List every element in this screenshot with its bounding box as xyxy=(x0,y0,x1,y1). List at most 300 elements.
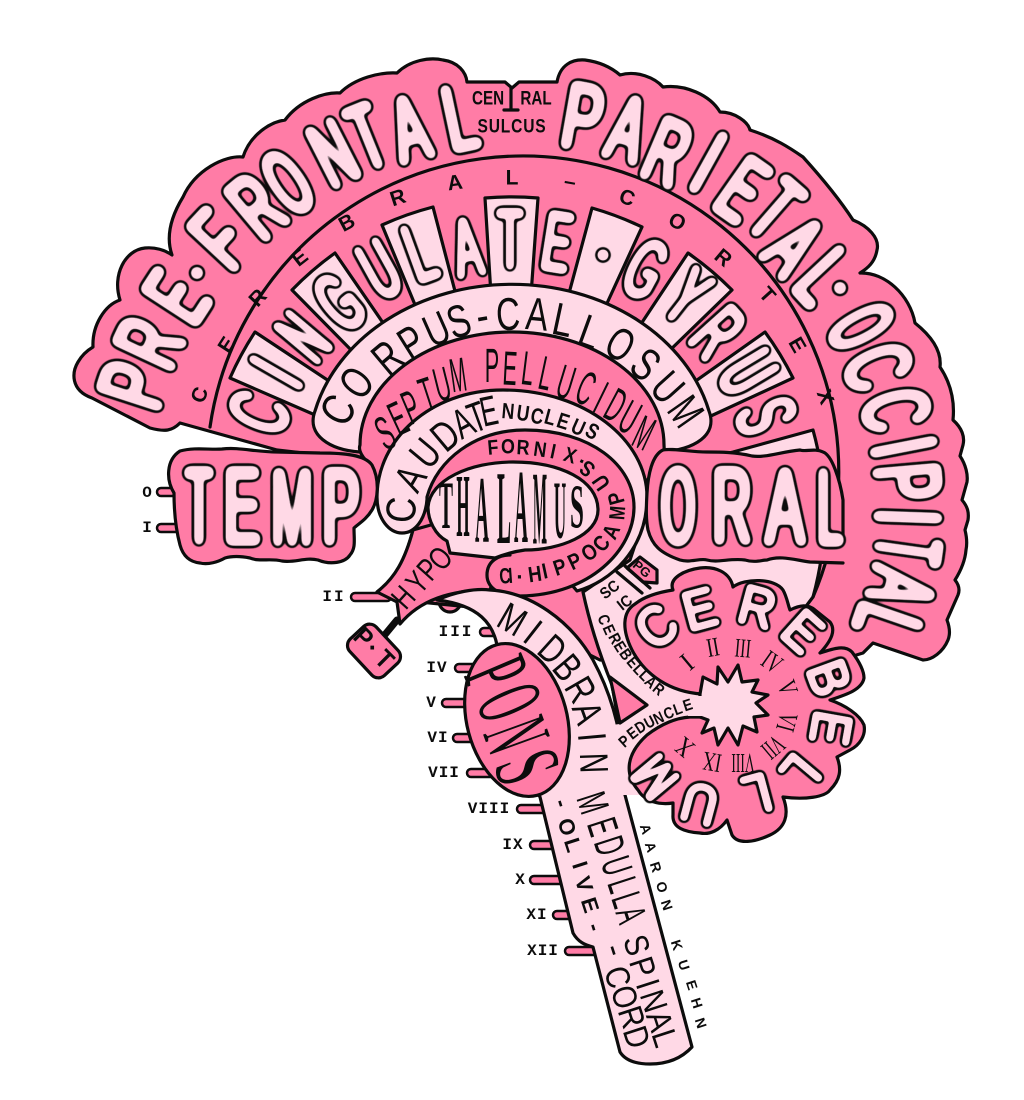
septum pellucidum lettering xyxy=(367,338,663,461)
hippocampus lettering: O xyxy=(577,539,603,567)
hippocampus lettering xyxy=(499,455,631,590)
cerebellum lettering: R xyxy=(732,574,782,642)
colliculus lettering: IC xyxy=(614,592,636,614)
cranial nerve labels: IV xyxy=(426,659,448,677)
temporal lettering: M xyxy=(272,446,312,568)
thalamus lettering: S xyxy=(570,474,584,542)
septum pellucidum lettering: T xyxy=(412,366,442,422)
peduncle light patch xyxy=(612,715,690,795)
caudate lettering: E xyxy=(476,388,502,436)
cord lettering: D xyxy=(615,1021,659,1053)
medulla lettering: D xyxy=(584,831,634,861)
cerebral cortex small label: – xyxy=(562,170,578,194)
artist credit: N xyxy=(692,1016,710,1030)
hippocampus lettering: P xyxy=(550,555,570,581)
fornix lettering: R xyxy=(516,436,530,460)
cerebral cortex small label: B xyxy=(335,209,359,237)
spinal lettering: L xyxy=(644,1024,686,1052)
cerebellar lettering: R xyxy=(604,631,624,648)
cranial nerve labels: VII xyxy=(428,764,460,782)
hippocampus lettering: C xyxy=(589,531,616,557)
cingulate gyrus lettering: S xyxy=(716,387,814,445)
corpus callosum lettering: L xyxy=(548,293,578,347)
prefrontal lettering: R xyxy=(94,304,206,382)
septum pellucidum lettering: U xyxy=(551,354,581,410)
thalamus shape xyxy=(428,462,598,558)
parietal occipital lettering: O xyxy=(807,289,913,365)
pons lettering xyxy=(444,642,581,797)
hippocampus lettering: P xyxy=(564,549,586,575)
artist credit: A xyxy=(642,840,660,854)
midbrain lettering: M xyxy=(490,595,534,645)
cerebellar lettering: L xyxy=(635,667,653,685)
artist credit: R xyxy=(647,860,665,874)
septum pellucidum lettering: E xyxy=(501,341,519,395)
nucleus lettering: E xyxy=(554,409,572,435)
temporal lettering: T xyxy=(186,447,212,567)
medulla lettering: L xyxy=(602,887,650,913)
septum pellucidum lettering: S xyxy=(367,405,403,461)
fornix hippocampus ring xyxy=(427,430,634,596)
olive lettering: - xyxy=(582,920,608,934)
septum pellucidum lettering: D xyxy=(596,377,636,433)
hippocampus lettering: I xyxy=(540,560,550,584)
cerebellum lobule numerals xyxy=(669,632,804,778)
peduncle opening xyxy=(688,696,712,716)
cerebellum lettering: B xyxy=(794,652,862,704)
septum pellucidum lettering: U xyxy=(428,356,456,412)
nucleus lettering xyxy=(501,399,603,445)
nucleus lettering: N xyxy=(501,399,515,425)
cerebellum lettering: C xyxy=(624,592,690,662)
hypothalamus lettering: Y xyxy=(398,564,436,600)
pons lettering: N xyxy=(463,705,571,765)
central sulcus label: SULCUS xyxy=(478,115,546,137)
hypothalamus lettering: O xyxy=(420,539,460,577)
cingulate gyrus lettering: T xyxy=(497,193,523,287)
septum pellucidum lettering: P xyxy=(485,338,499,392)
corpus callosum lettering: P xyxy=(389,316,435,370)
thalamus lettering: L xyxy=(497,451,511,567)
prefrontal lettering: L xyxy=(434,64,486,172)
hippocampus lettering: M xyxy=(605,505,631,521)
hypothalamus lettering xyxy=(384,539,460,616)
cerebral cortex small label: L xyxy=(506,166,519,190)
temporal lettering: L xyxy=(817,446,843,568)
prefrontal lettering xyxy=(77,64,486,420)
olive lettering xyxy=(549,796,608,934)
spinal lettering: I xyxy=(628,974,668,994)
corpus callosum lettering: - xyxy=(471,288,493,342)
nucleus lettering: L xyxy=(542,405,558,431)
temporal lobe left xyxy=(169,449,377,564)
hippocampus lettering: · xyxy=(516,564,524,590)
cerebellum lettering: L xyxy=(736,760,778,826)
cingulate gyrus lettering: G xyxy=(297,257,383,349)
cerebral cortex small label: C xyxy=(616,185,638,211)
cerebellum lobule numerals: X xyxy=(669,730,701,763)
cranial nerve labels: III xyxy=(439,623,473,641)
caudate lettering: U xyxy=(399,429,451,477)
cord lettering: C xyxy=(596,961,640,993)
artist credit: U xyxy=(675,958,693,972)
septum pellucidum lettering: L xyxy=(519,340,537,396)
hippocampus lettering: A xyxy=(598,521,626,543)
pituitary stalk xyxy=(383,620,397,637)
pituitary lettering: P xyxy=(347,622,379,654)
thalamus lettering: A xyxy=(514,450,528,566)
peduncle lettering: P xyxy=(616,732,634,751)
cerebellar lettering: A xyxy=(641,673,660,693)
pituitary lettering xyxy=(347,622,399,675)
midbrain lettering: B xyxy=(544,646,590,690)
medulla lettering: E xyxy=(577,812,627,842)
corpus callosum lettering: S xyxy=(441,295,477,349)
caudate lettering: T xyxy=(461,392,493,442)
thalamus lettering: M xyxy=(533,451,547,567)
corpus callosum lettering: O xyxy=(596,317,644,373)
cerebral cortex small label: A xyxy=(446,171,464,195)
cingulate gyrus lettering: U xyxy=(344,222,416,318)
cerebellum lettering: E xyxy=(769,598,835,666)
fornix lettering xyxy=(487,435,590,474)
septum pellucidum lettering: U xyxy=(610,389,650,445)
thalamus lettering: U xyxy=(554,464,566,556)
cerebral cortex small label: X xyxy=(812,386,838,408)
prefrontal lettering: O xyxy=(245,131,331,235)
colliculus lettering: SC xyxy=(597,577,623,603)
hypothalamus lettering: H xyxy=(384,578,422,616)
spinal lettering xyxy=(616,930,686,1052)
artist credit: E xyxy=(683,978,701,992)
parietal occipital lettering: C xyxy=(821,330,933,404)
cerebellar lettering: L xyxy=(629,661,647,679)
septum pellucidum lettering: E xyxy=(380,390,416,446)
cingulate gyrus light segments xyxy=(230,197,793,421)
nucleus lettering: U xyxy=(515,401,531,427)
parietal occipital lettering: C xyxy=(839,379,951,441)
cerebellar lettering: E xyxy=(609,639,629,655)
cord lettering: R xyxy=(610,1001,654,1033)
superior colliculus links xyxy=(617,566,650,593)
peduncle lettering: D xyxy=(632,718,650,738)
thalamus lettering: A xyxy=(475,457,489,563)
corpus callosum lettering: M xyxy=(657,387,713,437)
olive lettering: - xyxy=(549,796,575,810)
midbrain lettering: A xyxy=(563,696,611,730)
cerebral cortex small label: O xyxy=(664,208,690,236)
cord lettering: - xyxy=(595,939,635,961)
central sulcus label: RAL xyxy=(520,87,552,109)
corpus callosum lettering: U xyxy=(416,302,458,358)
nucleus lettering: C xyxy=(529,404,545,430)
olive lettering: I xyxy=(567,858,593,872)
olive lettering: O xyxy=(552,815,582,839)
caudate lettering: C xyxy=(378,495,426,525)
cranial nerve labels: I xyxy=(142,519,152,537)
spinal lettering: S xyxy=(616,930,658,960)
midbrain lettering xyxy=(490,595,615,774)
midbrain lettering: N xyxy=(571,752,615,774)
parietal occipital lettering: R xyxy=(629,97,705,209)
midbrain lettering: I xyxy=(516,611,550,653)
cerebellum lettering xyxy=(620,574,863,837)
parietal occipital lettering: A xyxy=(596,75,658,185)
nucleus lettering: U xyxy=(567,414,589,442)
olive lettering: L xyxy=(559,835,587,855)
pons lettering: P xyxy=(444,642,550,704)
cerebral cortex small label: E xyxy=(784,333,810,357)
corpus callosum lettering: A xyxy=(524,289,550,341)
parietal occipital lettering: I xyxy=(855,507,959,527)
medulla lettering: M xyxy=(567,787,617,819)
cord lettering xyxy=(595,939,659,1053)
parietal occipital lettering: P xyxy=(555,62,611,172)
corpus callosum shape xyxy=(313,284,711,452)
caudate nucleus shape xyxy=(377,390,647,591)
prefrontal lettering: N xyxy=(293,98,373,208)
pons lettering: S xyxy=(473,737,581,797)
mammillary body xyxy=(439,590,461,612)
cerebellum lettering: L xyxy=(768,742,832,802)
hippocampus lettering: P xyxy=(604,489,630,507)
cingulate gyrus lettering xyxy=(211,193,814,446)
corpus callosum lettering: C xyxy=(309,386,367,434)
corpus callosum lettering: C xyxy=(495,289,521,341)
nucleus lettering: S xyxy=(581,419,603,445)
thalamus lettering: T xyxy=(439,467,453,543)
cingulate outer arc xyxy=(210,156,839,597)
cerebellar lettering: B xyxy=(615,646,635,664)
prefrontal lettering: R xyxy=(209,155,305,259)
peduncle lettering: N xyxy=(651,709,667,729)
thalamus lettering: H xyxy=(456,457,470,557)
cingulate gyrus lettering: U xyxy=(699,336,795,410)
pituitary lettering: T xyxy=(369,645,399,675)
cerebellum xyxy=(625,568,864,841)
prefrontal lettering: F xyxy=(170,192,270,288)
cerebral cortex silhouette xyxy=(74,59,968,660)
cerebellum lobule numerals: II xyxy=(704,632,722,664)
caudate lettering: A xyxy=(384,457,436,499)
fornix lettering: I xyxy=(548,440,558,464)
cingulate gyrus lettering: A xyxy=(446,198,488,296)
prefrontal lettering: E xyxy=(123,254,231,340)
olive lettering: E xyxy=(576,894,604,916)
artist credit xyxy=(637,822,710,1030)
septum pellucidum lettering: C xyxy=(569,360,603,416)
artist credit: K xyxy=(668,938,686,952)
peduncle lettering: C xyxy=(661,704,677,724)
pineal lettering: PG xyxy=(630,557,654,581)
medulla lettering: U xyxy=(591,851,641,881)
septum pellucidum lettering: P xyxy=(394,379,428,435)
septum pellucidum lettering: M xyxy=(446,347,470,403)
midbrain lettering: D xyxy=(529,626,575,674)
cerebral cortex small label xyxy=(187,166,838,408)
triangle wedge xyxy=(610,677,647,723)
corpus callosum lettering: U xyxy=(640,362,694,414)
cerebral cortex small label: R xyxy=(387,185,409,211)
hippocampus lettering: U xyxy=(588,470,616,494)
colliculus lettering xyxy=(597,577,636,614)
cingulate gyrus lettering: E xyxy=(536,195,578,291)
cerebellum lettering: E xyxy=(676,576,724,644)
fornix lettering: O xyxy=(501,435,515,459)
septum pellucidum shape xyxy=(360,332,664,480)
medulla lettering: A xyxy=(606,901,655,929)
pituitary lettering: · xyxy=(369,632,377,662)
cerebellum star xyxy=(700,665,768,745)
corpus callosum lettering: L xyxy=(572,304,608,360)
hippocampus lettering: S xyxy=(576,455,600,481)
fornix lettering: X xyxy=(561,443,579,469)
cerebellum lobule numerals: I xyxy=(674,648,700,676)
peduncle lettering: E xyxy=(624,724,642,744)
spinal lettering: P xyxy=(622,952,664,982)
midbrain lettering: I xyxy=(569,731,615,743)
corpus callosum lettering: R xyxy=(363,331,413,385)
cerebellum lettering: E xyxy=(797,706,863,750)
cerebellum lettering: M xyxy=(620,743,690,811)
temporal lettering: A xyxy=(766,447,805,567)
peduncle lettering: E xyxy=(681,696,695,716)
cingulate gyrus lettering: L xyxy=(392,205,448,301)
peduncle lettering: U xyxy=(642,713,658,733)
septum pellucidum lettering: L xyxy=(534,345,558,401)
cerebellar lettering: C xyxy=(593,612,613,628)
cerebellum lobule numerals: VIII xyxy=(731,748,755,778)
parietal occipital lettering: T xyxy=(853,530,961,570)
caudate lettering: A xyxy=(444,398,482,448)
temporal lettering xyxy=(186,446,843,568)
pineal tag xyxy=(627,557,657,583)
cranial nerve labels: II xyxy=(322,588,346,606)
cranial nerve labels: VI xyxy=(427,729,449,747)
cerebral cortex small label: C xyxy=(187,384,213,406)
cerebellar lettering xyxy=(593,612,667,700)
caudate lettering xyxy=(378,388,502,525)
parietal occipital lettering: I xyxy=(850,429,956,465)
cingulate gyrus lettering: R xyxy=(672,290,762,376)
cranial nerve labels: O xyxy=(142,484,152,502)
cerebellum lobule numerals: V xyxy=(771,676,804,700)
cerebral cortex small label: R xyxy=(244,285,272,311)
parietal occipital lettering: T xyxy=(729,160,821,260)
artist credit: H xyxy=(688,996,706,1010)
parietal occipital lettering: I xyxy=(676,114,740,212)
central sulcus label: CEN xyxy=(472,87,504,109)
cord lettering: O xyxy=(603,980,647,1014)
spinal lettering: A xyxy=(639,1006,681,1036)
midbrain lettering: R xyxy=(555,670,605,710)
fornix lettering: F xyxy=(487,436,500,460)
hippocampus lettering: H xyxy=(527,562,543,588)
cingulate gyrus lettering: Y xyxy=(647,251,727,343)
cerebral cortex small label: R xyxy=(710,244,736,272)
corpus callosum lettering xyxy=(309,288,713,437)
artist credit: A xyxy=(637,822,655,836)
cerebellar lettering: E xyxy=(598,622,618,638)
cerebellum lobule numerals: IV xyxy=(756,645,788,680)
central sulcus mark xyxy=(504,88,518,110)
parietal occipital lettering: A xyxy=(744,199,843,296)
cingulate gyrus lettering: G xyxy=(609,221,681,319)
septum pellucidum lettering: M xyxy=(625,405,663,461)
corpus callosum lettering: O xyxy=(329,357,385,409)
parietal occipital lettering xyxy=(555,62,961,655)
pons xyxy=(449,632,585,808)
cerebral cortex small label: E xyxy=(287,245,313,271)
pituitary box xyxy=(344,620,404,682)
prefrontal lettering: A xyxy=(380,75,440,185)
hypothalamus shape xyxy=(377,500,520,624)
caudate lettering: D xyxy=(421,409,469,461)
fornix lettering: · xyxy=(574,450,590,474)
cerebellum lobule numerals: VI xyxy=(770,709,804,735)
parietal occipital lettering: E xyxy=(698,137,786,243)
artist credit: O xyxy=(653,879,671,895)
cerebellar lettering: E xyxy=(622,654,642,672)
hypothalamus lettering: P xyxy=(409,551,447,587)
medulla lettering xyxy=(567,787,655,929)
cranial nerve labels: X xyxy=(515,871,525,889)
posterior light wedge xyxy=(583,430,824,760)
cranial nerve labels: XI xyxy=(526,906,548,924)
temporal lettering: O xyxy=(661,447,695,567)
peduncle lettering xyxy=(616,696,695,751)
peduncle lettering: L xyxy=(671,700,685,720)
cranial nerve labels xyxy=(142,484,559,960)
cerebellar lettering: R xyxy=(649,680,667,700)
prefrontal lettering: T xyxy=(334,83,400,191)
pons lettering: O xyxy=(456,669,564,735)
cranial nerve stubs xyxy=(157,488,605,955)
cranial nerve labels: XII xyxy=(527,942,559,960)
cingulate gyrus lettering: C xyxy=(211,380,309,446)
cerebellum lobule numerals: III xyxy=(734,632,752,664)
cerebellum lobule numerals: VII xyxy=(756,729,790,765)
cranial nerve labels: IX xyxy=(502,836,524,854)
cerebral cortex small label: E xyxy=(214,333,240,357)
spinal lettering: N xyxy=(632,985,676,1017)
cranial nerve labels: V xyxy=(426,694,436,712)
midbrain and spinal cord xyxy=(437,589,692,1064)
temporal lettering: E xyxy=(224,447,260,567)
cingulate gyrus lettering: I xyxy=(234,344,320,402)
fornix lettering: N xyxy=(532,437,548,463)
medulla lettering: L xyxy=(598,872,646,898)
parietal occipital lettering: P xyxy=(853,459,961,505)
septum pellucidum lettering: I xyxy=(586,371,616,423)
parietal occipital lettering: A xyxy=(845,557,955,617)
parietal occipital lettering: L xyxy=(833,591,941,655)
thalamus lettering xyxy=(439,450,584,567)
cerebral cortex small label: T xyxy=(754,283,780,308)
artist credit: N xyxy=(658,898,676,912)
olive lettering: V xyxy=(570,873,598,895)
prefrontal lettering: P xyxy=(77,350,189,420)
corpus callosum lettering: S xyxy=(620,339,670,391)
temporal lettering: R xyxy=(713,447,751,567)
cingulate gyrus lettering: N xyxy=(258,296,348,378)
hippocampus lettering: CI xyxy=(499,564,512,590)
central sulcus label xyxy=(472,87,552,137)
parietal occipital lettering: L xyxy=(774,230,872,324)
temporal lobe right xyxy=(646,449,843,563)
cerebellum lettering: U xyxy=(675,769,725,837)
cranial nerve labels: VIII xyxy=(468,800,510,818)
